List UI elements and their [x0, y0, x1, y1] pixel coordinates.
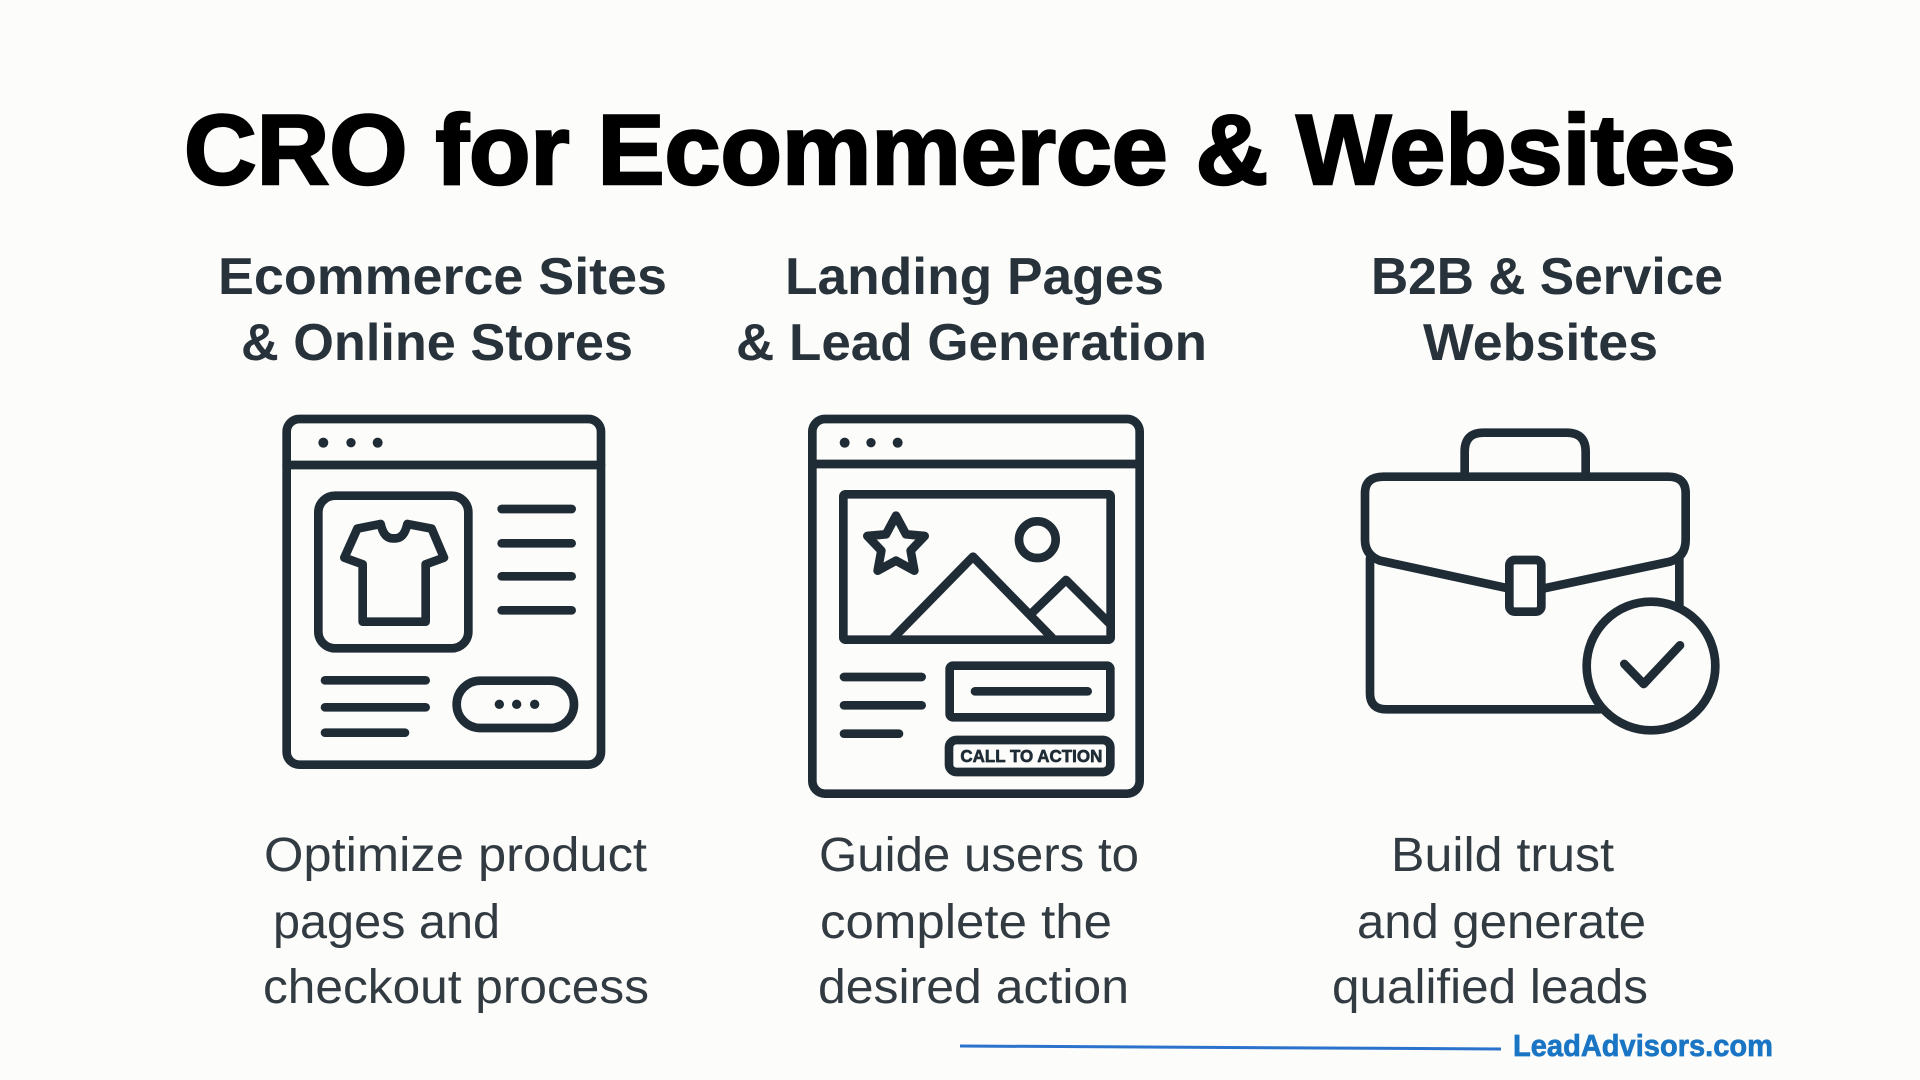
flap — [1365, 477, 1686, 588]
text lines bottom — [325, 680, 426, 733]
icon: briefcase with check badge — [1365, 433, 1715, 730]
heading: landing pages: Landing Pages — [785, 248, 1164, 306]
text lines — [844, 677, 922, 734]
footer rule — [960, 1046, 1501, 1049]
heading: ecommerce sites: Ecommerce Sites — [218, 248, 667, 306]
heading: b2b and service — [1371, 248, 1723, 372]
heading: ecommerce sites: & Online Stores — [241, 314, 633, 372]
star — [867, 516, 925, 571]
title: CRO for Ecommerce & Websites — [184, 94, 1736, 205]
icon: landing page browser window — [812, 419, 1140, 794]
clasp — [1509, 560, 1541, 612]
case body — [1370, 558, 1679, 709]
heading: ecommerce sites — [218, 248, 667, 372]
heading: landing pages — [736, 248, 1207, 372]
handle — [1465, 433, 1586, 477]
check mark — [1624, 645, 1680, 684]
heading: b2b and service: Websites — [1423, 314, 1658, 372]
description: ecommerce — [263, 829, 649, 1014]
description: b2b — [1332, 829, 1648, 1014]
description: ecommerce: Optimize product — [264, 829, 647, 882]
heading: landing pages: & Lead Generation — [736, 314, 1207, 372]
description: landing pages: complete the — [820, 896, 1112, 949]
call to action label: CALL TO ACTION — [960, 746, 1102, 766]
form field — [950, 666, 1110, 717]
product image box — [318, 496, 468, 648]
check badge — [1587, 602, 1715, 730]
button — [457, 681, 574, 728]
description: b2b: Build trust — [1391, 829, 1614, 882]
brand: LeadAdvisors.com: LeadAdvisors.com — [1513, 1028, 1773, 1063]
mountains — [894, 557, 1109, 637]
description: b2b: and generate — [1357, 896, 1646, 949]
description: ecommerce: pages and — [273, 896, 500, 949]
description: landing pages: Guide users to — [819, 829, 1139, 882]
heading: b2b and service: B2B & Service — [1371, 248, 1723, 306]
description: landing pages — [818, 829, 1139, 1014]
description: b2b: qualified leads — [1332, 961, 1648, 1014]
button dots — [495, 700, 539, 709]
field line — [975, 678, 1088, 704]
text lines right — [502, 509, 572, 610]
browser dots — [318, 438, 383, 448]
sun — [1019, 521, 1056, 558]
description: ecommerce: checkout process — [263, 961, 649, 1014]
call to action button — [949, 740, 1110, 772]
description: landing pages: desired action — [818, 961, 1129, 1014]
t-shirt — [344, 524, 444, 622]
browser dots — [840, 438, 903, 448]
icon: product page browser window — [287, 419, 601, 765]
hero image frame — [843, 494, 1111, 640]
